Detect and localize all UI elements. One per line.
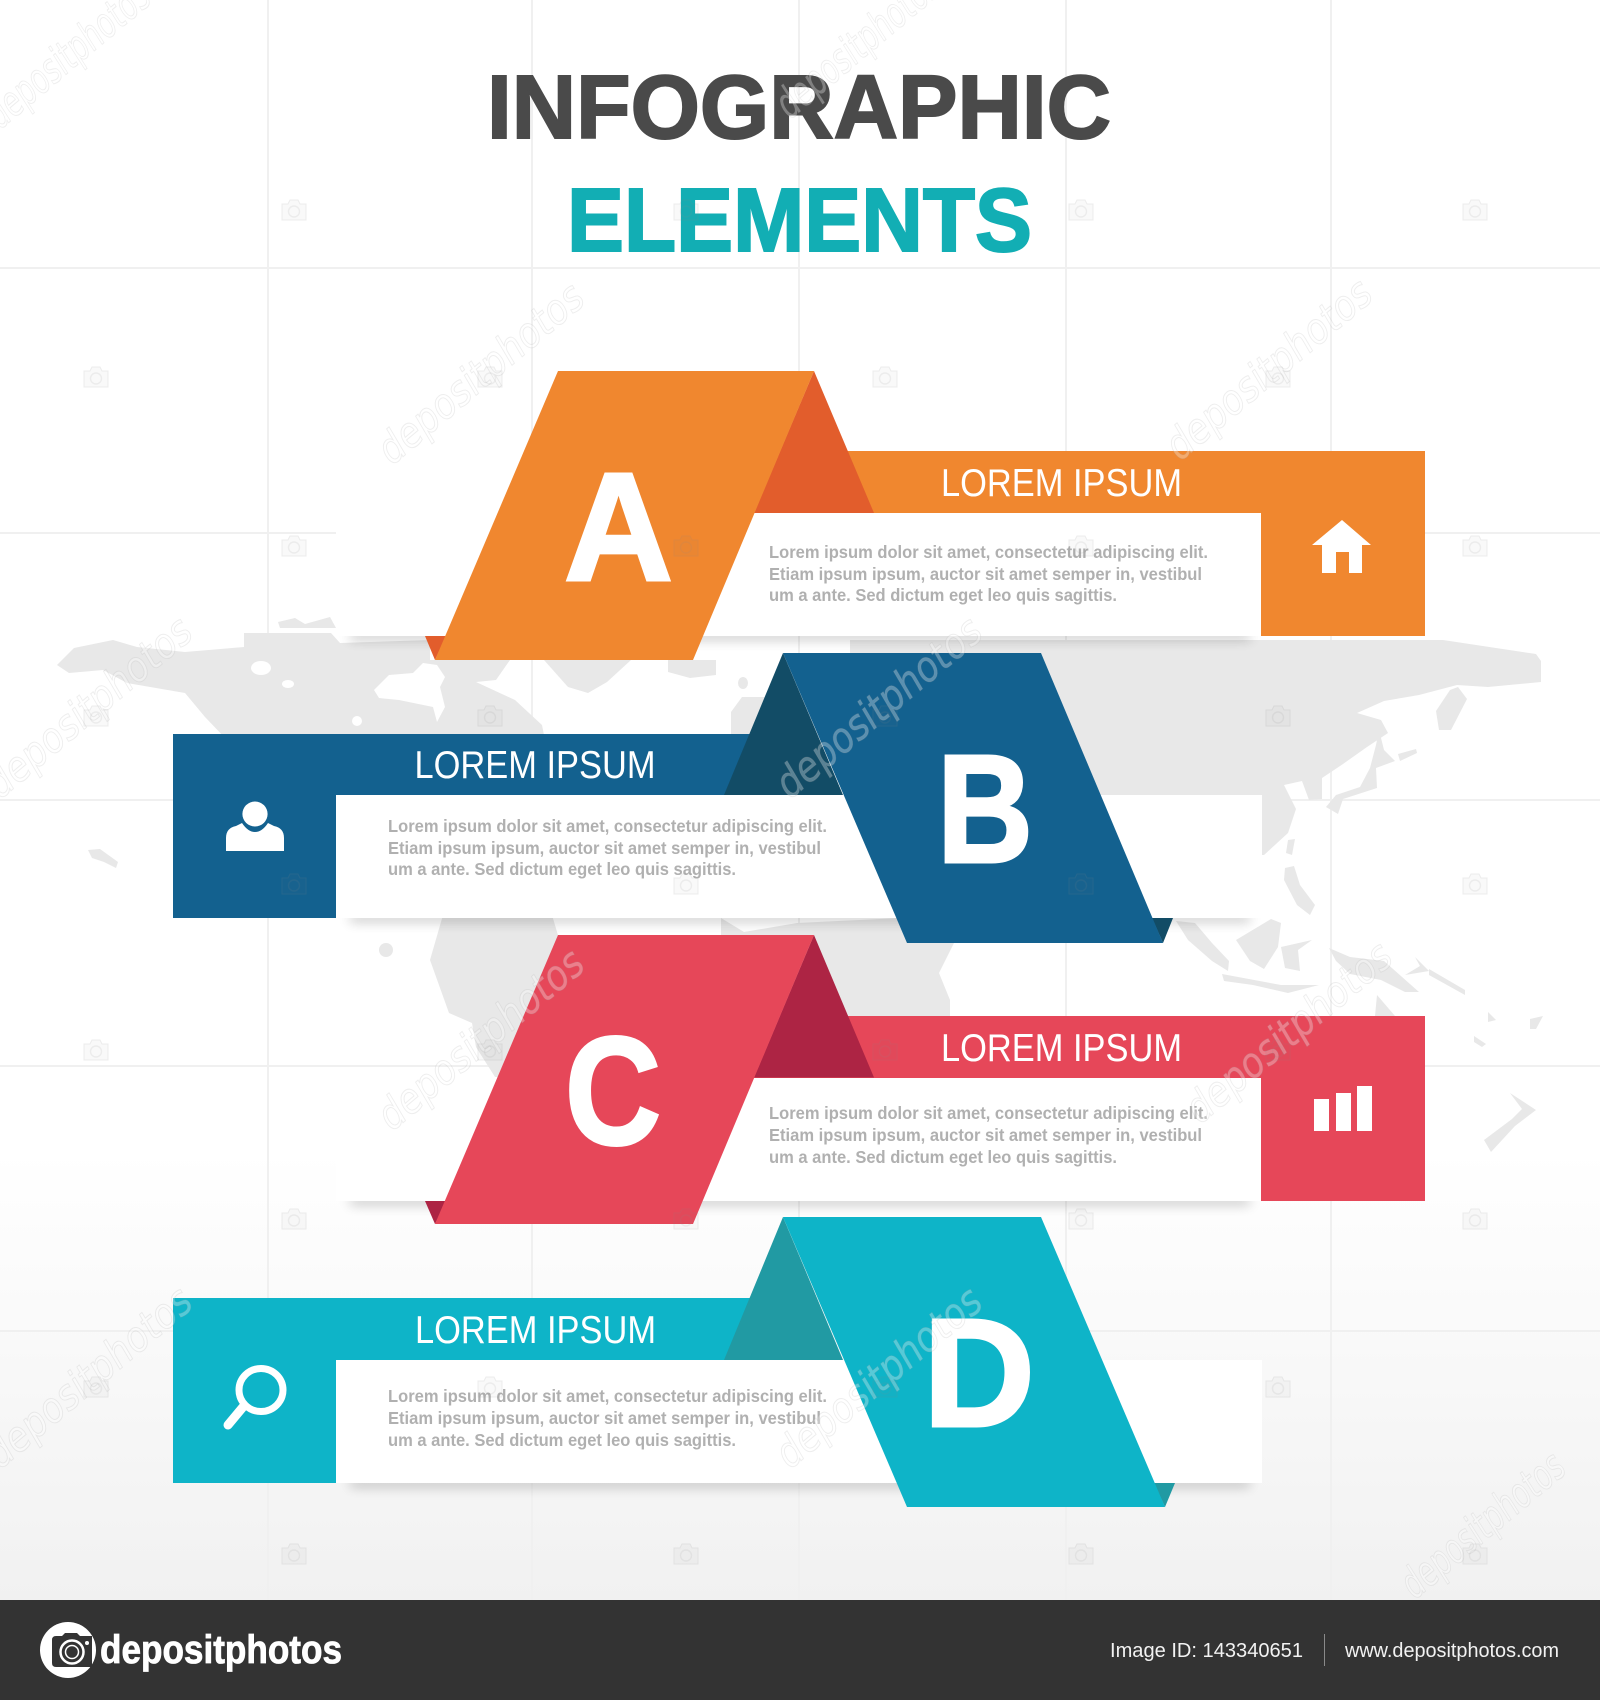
body text B: Lorem ipsum dolor sit amet, consectetur adipiscing elit. [388,816,827,836]
icon: house [1312,520,1371,573]
header bar C [750,1016,1425,1201]
panel: D [173,1217,1262,1507]
ribbon A [435,371,814,660]
header bar D [173,1298,800,1483]
ribbon D [783,1217,1165,1507]
ribbon C [435,935,814,1224]
body text D: Lorem ipsum dolor sit amet, consectetur adipiscing elit. [388,1386,827,1406]
body text C: um a ante. Sed dictum eget leo quis sagittis. [769,1147,1117,1167]
header bar B [173,734,800,918]
body text D: Etiam ipsum ipsum, auctor sit amet semper in, vestibul [388,1408,821,1428]
map: asia [850,640,1541,855]
panel: C [336,935,1425,1224]
body text C: Etiam ipsum ipsum, auctor sit amet semper in, vestibul [769,1125,1202,1145]
watermarks: depositphotos [1175,931,1402,1133]
body text D: um a ante. Sed dictum eget leo quis sagittis. [388,1430,736,1450]
icon: depositphotos logo [40,1622,96,1678]
image id: Image ID: 143340651 [1110,1640,1303,1662]
fold A [754,371,874,513]
body text A [769,542,1208,605]
website url: www.depositphotos.com [1344,1640,1559,1662]
title: INFOGRAPHIC [487,58,1111,158]
logo wordmark: depositphotos [100,1628,342,1672]
world map [57,617,1543,1152]
body text B: um a ante. Sed dictum eget leo quis sagittis. [388,859,736,879]
icon: bar chart [1314,1086,1372,1131]
footer bar [0,1600,1600,1700]
body text B [388,816,827,879]
panel: B [173,653,1262,943]
header bar A [750,451,1425,636]
letter C: C [565,1005,661,1177]
body text A: um a ante. Sed dictum eget leo quis sagittis. [769,585,1117,605]
heading D: LOREM IPSUM [415,1309,656,1352]
watermarks: depositphotos [765,606,992,808]
letter B: B [937,723,1033,895]
map: new zealand [1484,1093,1536,1152]
fold D [724,1217,843,1360]
panel: A [336,371,1425,660]
body text D [388,1386,827,1450]
watermarks: depositphotos [367,272,594,474]
map: south america [430,915,600,1077]
map: north america [57,633,545,740]
body text C [769,1103,1208,1167]
heading B: LOREM IPSUM [414,744,656,787]
fold C [754,935,874,1078]
watermarks: depositphotos [367,938,594,1140]
heading C: LOREM IPSUM [941,1027,1182,1070]
map: south east asia [1286,839,1295,855]
body text C: Lorem ipsum dolor sit amet, consectetur adipiscing elit. [769,1103,1208,1123]
letter D: D [923,1287,1035,1459]
heading A: LOREM IPSUM [941,462,1182,505]
watermarks: depositphotos [765,1276,992,1478]
icon: magnifier [228,1368,283,1425]
title: ELEMENTS [567,171,1032,271]
body text A: Etiam ipsum ipsum, auctor sit amet semper in, vestibul [769,564,1202,584]
watermarks: depositphotos [1155,268,1382,470]
fold B [724,653,843,795]
map: africa [721,918,954,1020]
icon: person [226,802,284,851]
title [487,58,1111,271]
ribbon B [783,653,1163,943]
body text A: Lorem ipsum dolor sit amet, consectetur adipiscing elit. [769,542,1208,562]
body text B: Etiam ipsum ipsum, auctor sit amet semper in, vestibul [388,838,821,858]
letter A: A [564,441,673,613]
